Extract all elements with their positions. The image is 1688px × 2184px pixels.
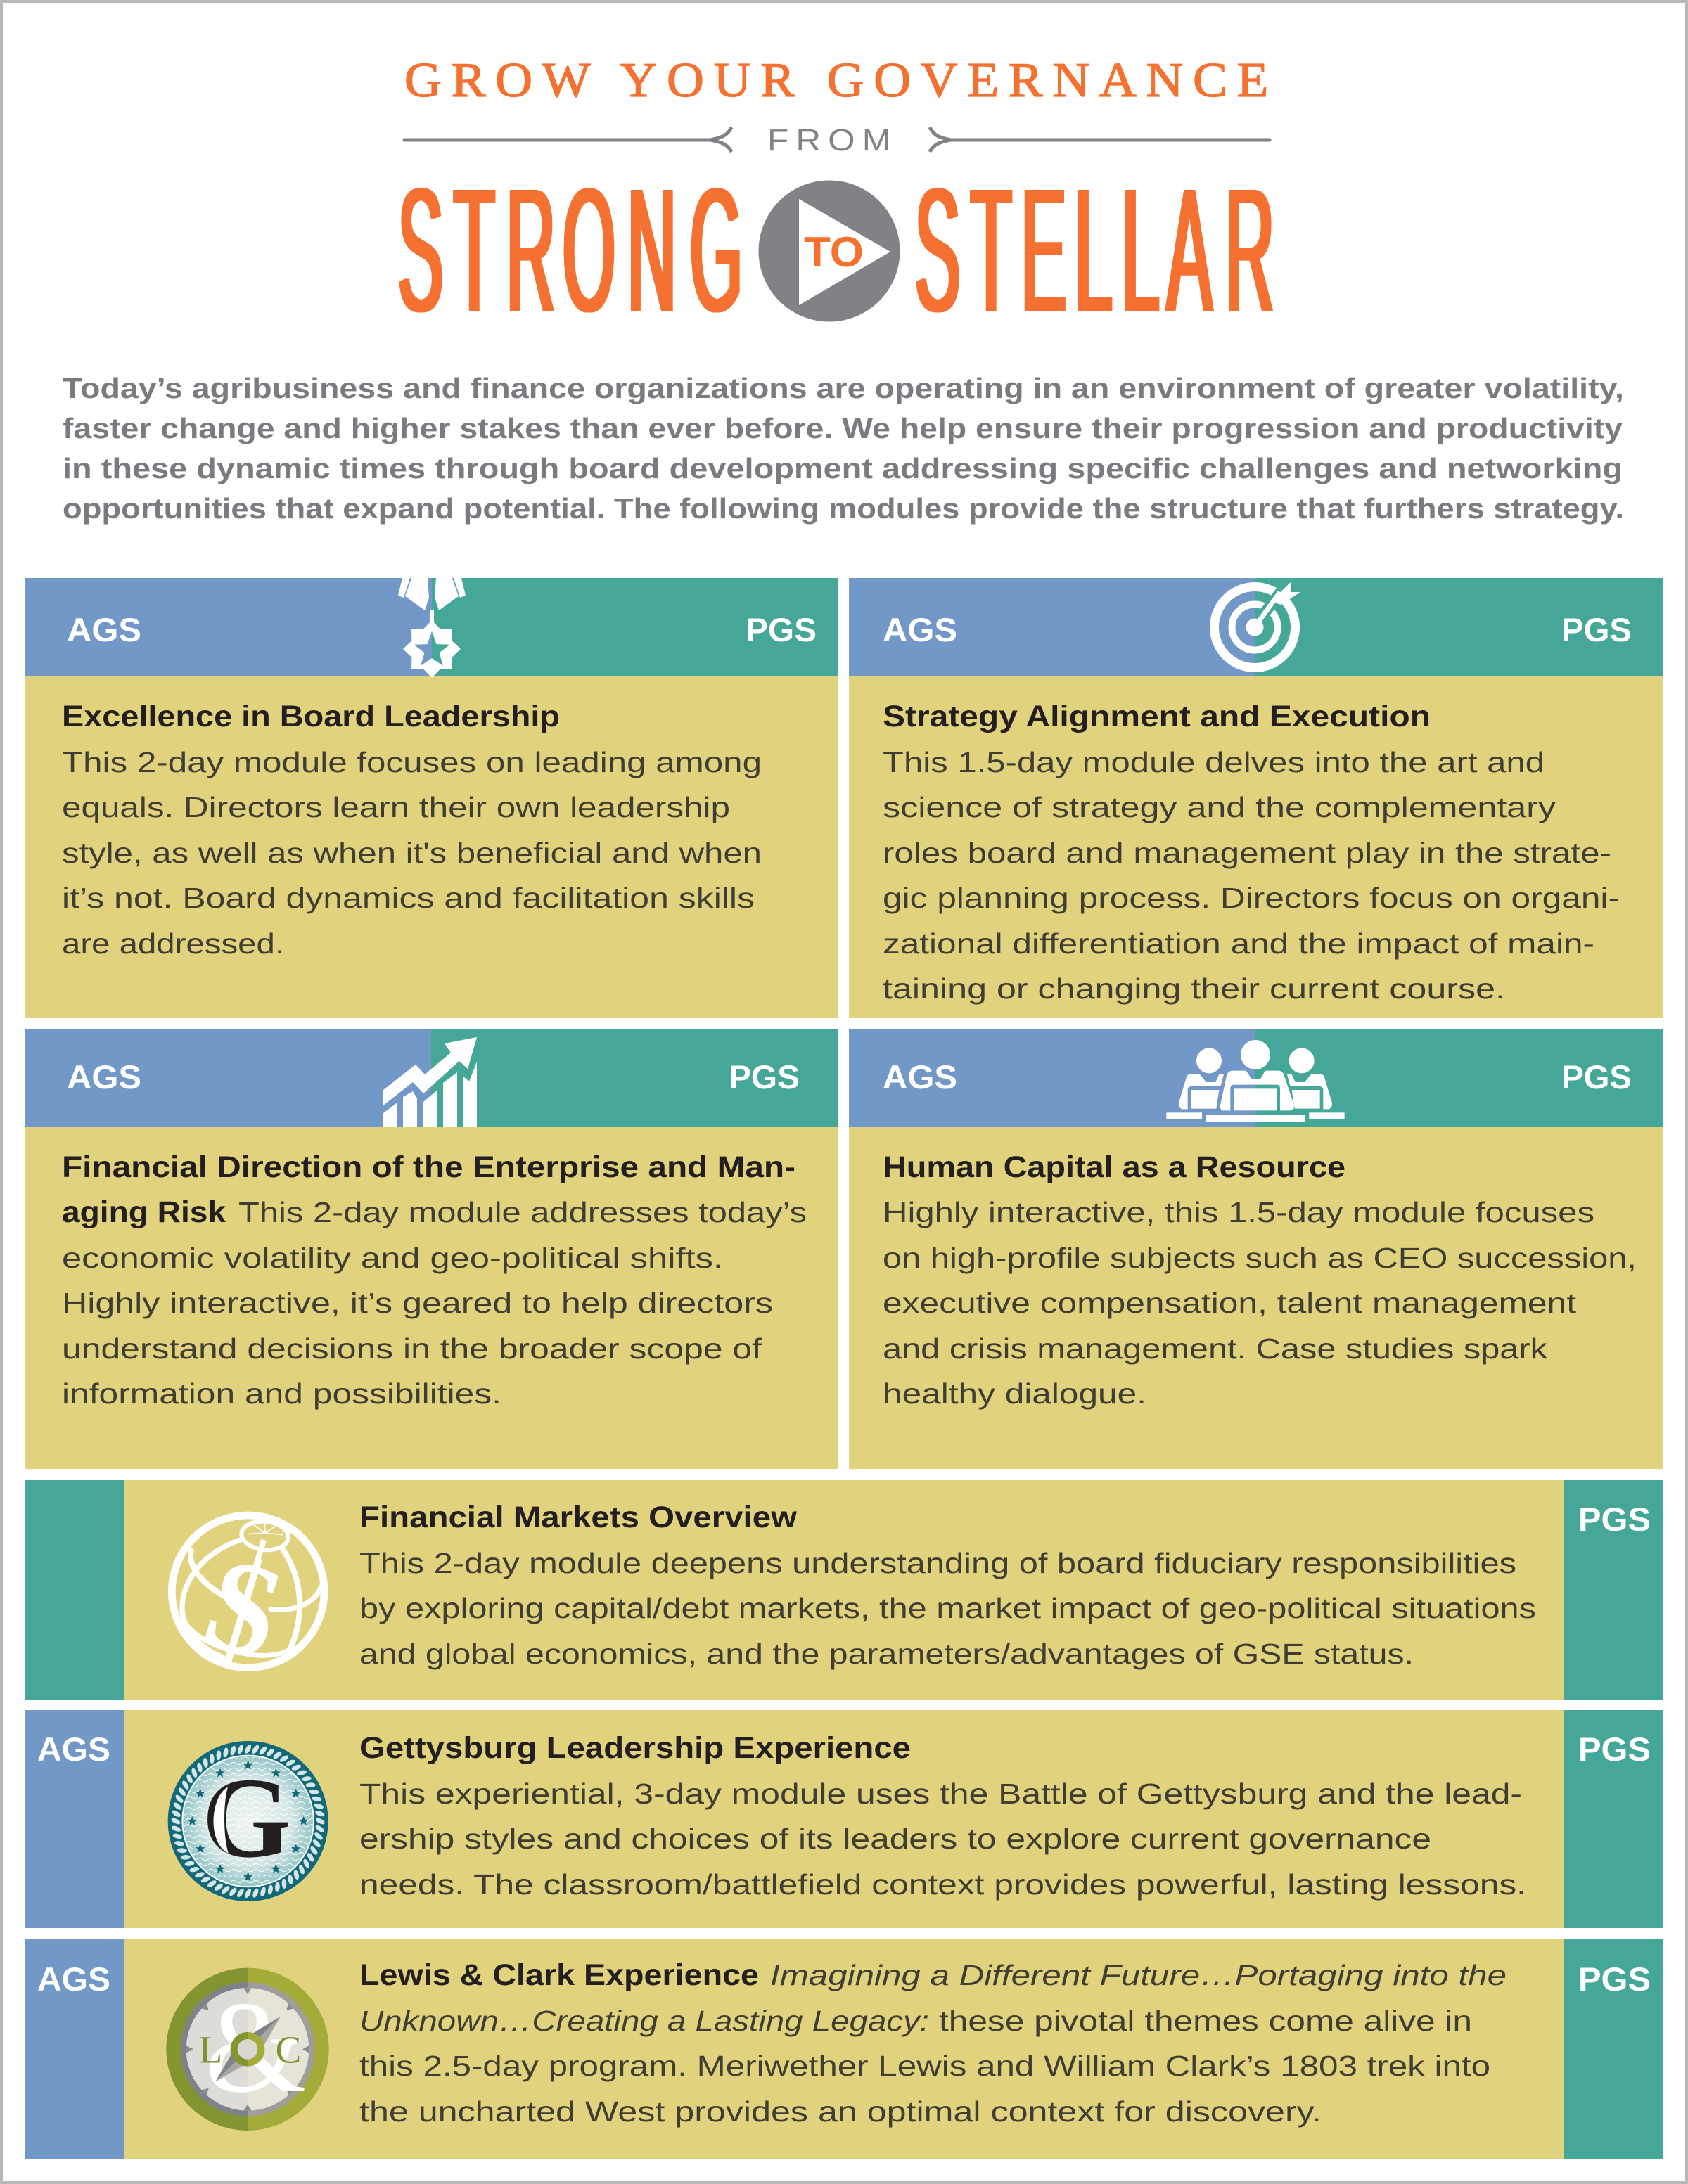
- module description: the uncharted West provides an optimal context for discovery.: [359, 2095, 1322, 2128]
- module description: [359, 1547, 1536, 1670]
- intro paragraph: in these dynamic times through board development addressing specific challenges and networking: [63, 452, 1623, 484]
- icon: target: [1214, 582, 1300, 668]
- panel: gettysburg leadership experience: [25, 1710, 1663, 1928]
- icon: medal: [398, 578, 466, 678]
- panel: human capital as a resource: AGS: [883, 1058, 957, 1096]
- from divider: FROM: [767, 123, 898, 158]
- intro paragraph: [63, 372, 1624, 525]
- panel: financial direction of the enterprise: [25, 1029, 838, 1469]
- module heading: Lewis & Clark Experience: [359, 1958, 759, 1992]
- module description: on high-profile subjects such as CEO succession,: [883, 1242, 1637, 1274]
- icon: board members: [1166, 1040, 1345, 1122]
- module description: ership styles and choices of its leaders to explore current governance: [359, 1823, 1431, 1855]
- intro paragraph: opportunities that expand potential. The following modules provide the structure that furthers strategy.: [63, 492, 1624, 525]
- module description: aging Risk: [62, 1195, 226, 1229]
- panel: strategy alignment and execution: PGS: [1561, 611, 1632, 648]
- from divider: [404, 123, 1270, 158]
- panel: gettysburg leadership experience: AGS: [37, 1730, 110, 1768]
- module heading: Financial Direction of the Enterprise and Man-: [62, 1150, 795, 1184]
- panel: excellence in board leadership: PGS: [746, 611, 817, 648]
- icon: gettysburg seal: G: [202, 1754, 291, 1882]
- module description: this 2.5-day program. Meriwether Lewis and William Clark’s 1803 trek into: [359, 2050, 1490, 2082]
- icon: globe with dollar sign: $: [191, 1529, 297, 1689]
- module description: Highly interactive, it’s geared to help directors: [62, 1287, 773, 1319]
- module description: taining or changing their current course.: [883, 972, 1505, 1005]
- icon: rising chart: [383, 1037, 477, 1127]
- module description: This experiential, 3-day module uses the Battle of Gettysburg and the lead-: [359, 1778, 1522, 1810]
- module heading: Human Capital as a Resource: [883, 1150, 1345, 1184]
- panel: financial markets overview: PGS: [1578, 1501, 1651, 1538]
- module description: [883, 746, 1620, 1005]
- panel: financial direction of the enterprise: PGS: [729, 1058, 800, 1096]
- panel: human capital as a resource: [849, 1029, 1663, 1469]
- panel: financial markets overview: [25, 1480, 1663, 1700]
- module description: [883, 1196, 1637, 1410]
- module description: [62, 1195, 807, 1410]
- panel: financial direction of the enterprise: AGS: [67, 1058, 141, 1096]
- module description: by exploring capital/debt markets, the market impact of geo-political situations: [359, 1592, 1536, 1624]
- module description: information and possibilities.: [62, 1377, 501, 1410]
- panel: strategy alignment and execution: AGS: [883, 611, 957, 648]
- module description: healthy dialogue.: [883, 1377, 1146, 1410]
- panel: strategy alignment and execution: [849, 578, 1663, 1018]
- module description: Imagining a Different Future…Portaging into the: [770, 1959, 1507, 1991]
- module heading: Excellence in Board Leadership: [62, 700, 560, 733]
- module heading: Gettysburg Leadership Experience: [359, 1731, 911, 1765]
- module description: roles board and management play in the strate-: [883, 837, 1611, 869]
- module description: economic volatility and geo-political shifts.: [62, 1242, 723, 1274]
- module description: these pivotal themes come alive in: [939, 2005, 1472, 2037]
- module description: Unknown…Creating a Lasting Legacy:: [359, 2005, 929, 2037]
- module description: and crisis management. Case studies spark: [883, 1332, 1548, 1365]
- panel: gettysburg leadership experience: PGS: [1578, 1730, 1651, 1768]
- module description: executive compensation, talent management: [883, 1287, 1577, 1319]
- module description: [62, 746, 762, 960]
- panel: lewis and clark experience: AGS: [37, 1960, 110, 1998]
- panel: excellence in board leadership: [25, 578, 838, 1018]
- module description: understand decisions in the broader scope of: [62, 1332, 762, 1365]
- module description: This 2-day module addresses today’s: [238, 1196, 807, 1228]
- intro paragraph: Today’s agribusiness and finance organizations are operating in an environment of greater volatility,: [63, 372, 1624, 404]
- icon: gettysburg seal: [168, 1741, 328, 1901]
- header block: [398, 53, 1278, 349]
- module description: style, as well as when it's beneficial and when: [62, 837, 762, 869]
- module description: This 2-day module focuses on leading among: [62, 746, 762, 778]
- module description: it’s not. Board dynamics and facilitation skills: [62, 882, 755, 914]
- icon: globe with dollar sign: [172, 1515, 324, 1689]
- headline: stellar: STELLAR: [915, 153, 1274, 349]
- module description: [359, 1778, 1526, 1901]
- title: grow your governance: GROW YOUR GOVERNANCE: [404, 53, 1278, 108]
- module description: science of strategy and the complementary: [883, 791, 1556, 823]
- module description: zational differentiation and the impact of main-: [883, 927, 1594, 960]
- arrow badge: to: TO: [804, 229, 864, 276]
- icon: lewis and clark compass: &: [205, 1975, 307, 2120]
- module heading: Strategy Alignment and Execution: [883, 700, 1431, 733]
- panel: human capital as a resource: PGS: [1561, 1058, 1632, 1096]
- module description: and global economics, and the parameters/advantages of GSE status.: [359, 1638, 1414, 1670]
- panel: excellence in board leadership: AGS: [67, 611, 141, 648]
- module description: needs. The classroom/battlefield context provides powerful, lasting lessons.: [359, 1868, 1526, 1901]
- module description: are addressed.: [62, 927, 284, 960]
- arrow badge: to: [758, 180, 900, 322]
- module description: This 1.5-day module delves into the art and: [883, 746, 1545, 778]
- module description: equals. Directors learn their own leadership: [62, 791, 730, 823]
- icon: lewis and clark compass: C: [276, 2028, 301, 2071]
- module description: Highly interactive, this 1.5-day module focuses: [883, 1196, 1594, 1228]
- headline: strong: STRONG: [398, 153, 743, 349]
- panel: lewis and clark experience: PGS: [1578, 1960, 1651, 1998]
- icon: lewis and clark compass: [166, 1968, 329, 2131]
- intro paragraph: faster change and higher stakes than ever before. We help ensure their progression and productivity: [63, 412, 1623, 444]
- module description: This 2-day module deepens understanding of board fiduciary responsibilities: [359, 1547, 1516, 1579]
- module description: gic planning process. Directors focus on organi-: [883, 882, 1620, 914]
- icon: lewis and clark compass: L: [199, 2028, 222, 2071]
- panel: lewis and clark experience: [25, 1939, 1663, 2159]
- module description: [359, 1959, 1507, 2128]
- module heading: Financial Markets Overview: [359, 1501, 798, 1534]
